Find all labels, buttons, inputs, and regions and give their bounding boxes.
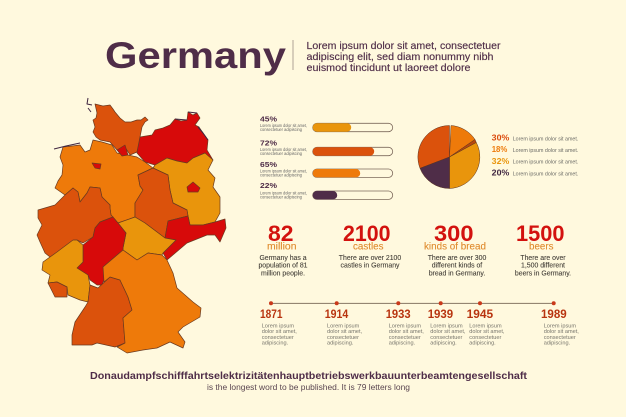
stat: 2100 castles: castles bbox=[353, 242, 384, 252]
event: 1945 bbox=[467, 309, 505, 346]
stat: 2100 castles bbox=[339, 221, 401, 270]
stat: 300 kinds of bread: There are over 300 bbox=[428, 255, 486, 262]
event: 1933: adipiscing. bbox=[389, 340, 416, 346]
bar row: 45%: 45% bbox=[260, 115, 278, 124]
event: 1989 bbox=[541, 309, 579, 346]
event: 1914: adipiscing. bbox=[327, 340, 354, 346]
event: 1989: adipiscing. bbox=[544, 340, 571, 346]
bar row: 65%: consectetuer adipiscing bbox=[260, 172, 302, 177]
region: Bavaria bbox=[103, 250, 201, 353]
bar row: 72%: Lorem ipsum dolor sit amet, bbox=[260, 147, 307, 152]
event: 1914: 1914 bbox=[325, 309, 349, 321]
event: 1871: Lorem ipsum bbox=[262, 324, 294, 330]
pie legend: 30% bbox=[492, 133, 510, 143]
stats row bbox=[258, 221, 571, 278]
longest word footer: Donaudampfschifffahrtselektrizitätenhauptbetriebswerkbauunterbeamtengesellschaft bbox=[90, 370, 528, 382]
region: Hamburg bbox=[117, 145, 128, 156]
stat: 300 kinds of bread bbox=[424, 221, 486, 278]
event: 1945: consectetuer bbox=[469, 335, 501, 341]
bar row: 22%: 22% bbox=[260, 181, 278, 190]
North Sea and Baltic islands bbox=[54, 98, 208, 149]
stat: 2100 castles: 2100 bbox=[343, 221, 390, 246]
bar row: 22%: Lorem ipsum dolor sit amet, bbox=[260, 190, 307, 195]
stat: 1500 beers bbox=[515, 221, 571, 278]
region: Brandenburg bbox=[153, 153, 220, 225]
timeline bbox=[260, 301, 579, 346]
region: Bremen bbox=[92, 163, 101, 169]
pie legend: 18% bbox=[492, 144, 508, 154]
event: 1933: consectetuer bbox=[389, 335, 421, 341]
stat: 300 kinds of bread: bread in Germany. bbox=[429, 270, 485, 278]
event: 1933: Lorem ipsum bbox=[389, 324, 421, 330]
region: Thuringia bbox=[118, 217, 176, 260]
region: Berlin bbox=[187, 182, 200, 192]
region: Hesse bbox=[77, 217, 126, 285]
event: 1989: dolor sit amet, bbox=[544, 329, 579, 335]
stat: 82 million: population of 81 bbox=[258, 263, 308, 270]
longest word footer bbox=[90, 370, 528, 392]
stat: 300 kinds of bread: kinds of bread bbox=[424, 242, 486, 252]
event: 1871: dolor sit amet, bbox=[262, 329, 297, 335]
event: 1939: dolor sit amet, bbox=[430, 329, 466, 335]
stat: 2100 castles: castles in Germany bbox=[341, 263, 400, 270]
bar row: 65% bbox=[260, 160, 393, 177]
region: Mecklenburg bbox=[137, 112, 213, 165]
bar row: 45% bbox=[260, 115, 393, 132]
stat: 82 million: 82 bbox=[268, 221, 294, 246]
event: 1914: consectetuer bbox=[327, 335, 359, 341]
map of Germany bbox=[37, 98, 226, 353]
pie legend: Lorem ipsum dolor sit amet. bbox=[513, 148, 579, 154]
event: 1914: Lorem ipsum bbox=[327, 324, 360, 330]
event: 1933: 1933 bbox=[386, 309, 411, 321]
bar row: 45%: consectetuer adipiscing bbox=[260, 127, 302, 132]
pie legend: 32% bbox=[492, 156, 510, 166]
event: 1933 bbox=[386, 309, 424, 346]
event: 1945: adipiscing. bbox=[469, 340, 496, 346]
stat: 1500 beers: beers in Germany. bbox=[515, 270, 571, 278]
stat: 1500 beers: beers bbox=[529, 242, 554, 252]
progress bars bbox=[260, 115, 393, 199]
region: Saarland bbox=[48, 282, 67, 297]
event: 1939: adipiscing. bbox=[430, 340, 457, 346]
intro text bbox=[306, 41, 501, 74]
event: 1871: consectetuer bbox=[262, 335, 294, 341]
event: 1939: 1939 bbox=[428, 309, 453, 321]
pie chart bbox=[418, 125, 480, 189]
intro text: adipiscing elit, sed diam nonummy nibh bbox=[306, 52, 494, 63]
event: 1945: 1945 bbox=[467, 309, 494, 321]
event: 1871: 1871 bbox=[260, 309, 283, 321]
stat: 300 kinds of bread: different kinds of bbox=[432, 263, 482, 270]
stat: 82 million: Germany has a bbox=[259, 255, 307, 262]
region: Lower Saxony bbox=[55, 140, 153, 223]
event: 1939 bbox=[428, 309, 466, 346]
pie legend: Lorem ipsum dolor sit amet. bbox=[513, 160, 579, 166]
bar row: 45%: Lorem ipsum dolor sit amet, bbox=[260, 123, 307, 128]
event: 1933: dolor sit amet, bbox=[389, 329, 424, 335]
intro text: Lorem ipsum dolor sit amet, consectetuer bbox=[306, 41, 501, 52]
event: 1939: Lorem ipsum bbox=[430, 324, 463, 330]
region: North Rhine-Westphalia bbox=[37, 187, 113, 257]
stat: 2100 castles: There are over 2100 bbox=[339, 255, 401, 262]
event: 1871: adipiscing. bbox=[262, 340, 289, 346]
event: 1914: dolor sit amet, bbox=[327, 329, 363, 335]
pie legend: 20% bbox=[492, 168, 510, 178]
bar row: 22%: consectetuer adipiscing bbox=[260, 194, 302, 199]
stat: 1500 beers: 1500 bbox=[516, 221, 564, 246]
stat: 82 million: million people. bbox=[261, 270, 305, 278]
bar row: 72% bbox=[260, 139, 393, 156]
event: 1914 bbox=[325, 309, 363, 346]
stat: 1500 beers: There are over bbox=[520, 255, 566, 262]
longest word footer: is the longest word to be published. It is 79 letters long bbox=[207, 383, 410, 392]
stat: 1500 beers: 1,500 different bbox=[521, 263, 565, 270]
pie legend bbox=[492, 133, 579, 178]
event: 1939: consectetuer bbox=[430, 335, 462, 341]
event: 1945: dolor sit amet, bbox=[469, 329, 505, 335]
bar row: 65%: 65% bbox=[260, 160, 278, 169]
event: 1989: Lorem ipsum bbox=[544, 324, 576, 330]
bar row: 65%: Lorem ipsum dolor sit amet, bbox=[260, 168, 307, 173]
stat: 82 million: million bbox=[267, 242, 296, 252]
region: Saxony bbox=[163, 216, 226, 260]
region: Rhineland-Palatinate bbox=[42, 240, 90, 302]
event: 1871 bbox=[260, 309, 297, 346]
pie legend: Lorem ipsum dolor sit amet. bbox=[513, 136, 579, 142]
stat: 300 kinds of bread: 300 bbox=[434, 221, 474, 246]
region: Schleswig-Holstein bbox=[93, 104, 148, 155]
bar row: 72%: 72% bbox=[260, 139, 278, 148]
event: 1989: 1989 bbox=[541, 309, 567, 321]
bar row: 22% bbox=[260, 181, 393, 199]
region: Saxony-Anhalt bbox=[135, 168, 188, 238]
event: 1989: consectetuer bbox=[544, 335, 576, 341]
region: Baden-Wurttemberg bbox=[72, 277, 132, 347]
pie legend: Lorem ipsum dolor sit amet. bbox=[513, 172, 579, 178]
intro text: euismod tincidunt ut laoreet dolore bbox=[306, 63, 471, 74]
event: 1945: Lorem ipsum bbox=[469, 324, 502, 330]
stat: 82 million bbox=[258, 221, 308, 278]
title: Germany bbox=[105, 35, 286, 76]
bar row: 72%: consectetuer adipiscing bbox=[260, 151, 302, 156]
